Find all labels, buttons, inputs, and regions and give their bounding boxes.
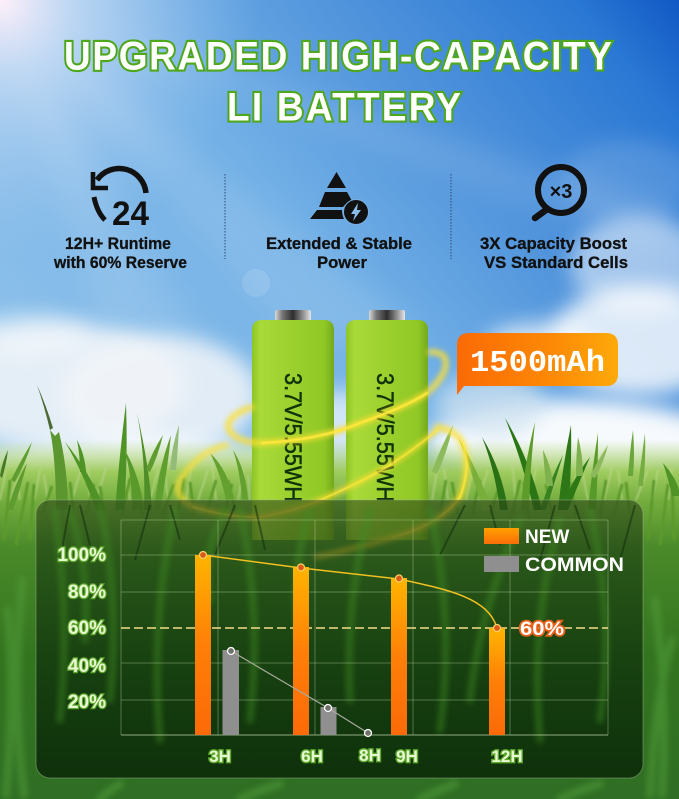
icon: magnifier x3 <box>535 167 584 218</box>
background: grass field <box>0 385 679 799</box>
feature: extended power <box>266 172 412 272</box>
text: runtime caption <box>53 235 187 272</box>
energy swirl around batteries <box>178 352 467 557</box>
y-axis labels: 20% <box>68 692 106 713</box>
x-axis labels: 12H <box>491 747 523 766</box>
callout: 60% reserve: 60% <box>520 618 564 640</box>
x-axis labels: 3H <box>209 747 231 766</box>
text: capacity caption: VS Standard Cells <box>484 254 628 272</box>
background: clouds <box>0 140 679 502</box>
y-axis labels: 40% <box>68 656 106 677</box>
feature: 12H+ runtime <box>53 168 187 272</box>
battery: right cell <box>346 310 428 540</box>
line: common battery decay <box>228 648 372 736</box>
text: extended power caption: Power <box>317 254 368 272</box>
feature: 3X capacity <box>480 167 628 272</box>
title <box>64 34 612 130</box>
text: runtime caption: with 60% Reserve <box>53 254 187 272</box>
text: extended power caption <box>266 235 412 272</box>
icon: 24-hour clock arrow: 24 <box>112 195 149 233</box>
icon: magnifier x3: ×3 <box>550 181 572 203</box>
x-axis labels: 6H <box>301 747 323 766</box>
line: new battery decay <box>200 552 500 632</box>
bars: new battery <box>195 555 505 735</box>
legend: NEW <box>525 527 569 548</box>
legend <box>484 527 624 576</box>
divider left <box>224 174 226 259</box>
y-axis labels: 80% <box>68 582 106 603</box>
text: capacity caption <box>480 235 628 272</box>
chart grid <box>121 520 608 735</box>
title: LI BATTERY <box>227 85 461 130</box>
title: UPGRADED HIGH-CAPACITY <box>64 34 612 79</box>
y-axis labels: 60% <box>68 618 106 639</box>
60% reference line <box>121 627 608 629</box>
icon: pyramid with bolt <box>310 172 368 224</box>
battery label: left: 3.7V/5.55WH <box>279 373 306 502</box>
y-axis labels: 100% <box>57 545 106 566</box>
callout: 1500mAh capacity: 1500mAh <box>470 346 605 381</box>
battery: left cell <box>252 310 334 540</box>
text: runtime caption: 12H+ Runtime <box>65 235 171 253</box>
text: capacity caption: 3X Capacity Boost <box>480 235 628 253</box>
y-axis labels <box>57 545 106 713</box>
battery label: right: 3.7V/5.55WH <box>371 373 398 502</box>
bars: common battery <box>222 650 336 735</box>
x-axis labels <box>209 746 523 766</box>
x-axis labels: 9H <box>396 747 418 766</box>
text: extended power caption: Extended & Stable <box>266 235 412 253</box>
callout: 1500mAh capacity <box>457 333 618 395</box>
divider right <box>450 174 452 259</box>
panel: runtime chart <box>36 500 643 778</box>
legend: COMMON <box>525 555 624 576</box>
x-axis labels: 8H <box>359 746 381 765</box>
